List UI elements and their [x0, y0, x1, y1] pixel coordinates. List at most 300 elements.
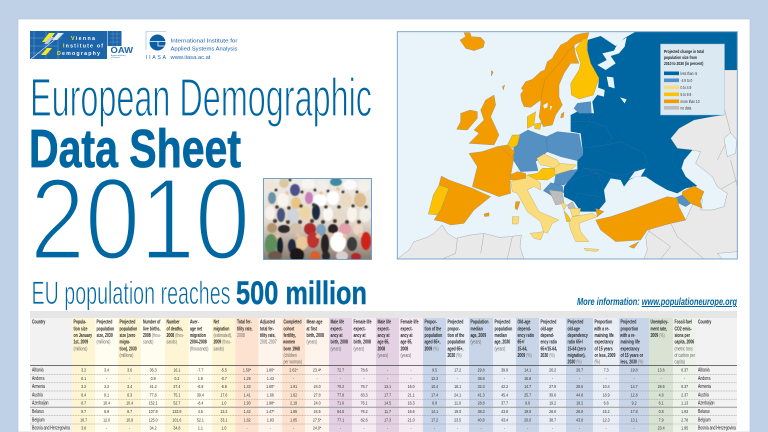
- table header row: 2008: [237, 332, 245, 338]
- row: Belgium: 77.1: [337, 417, 345, 423]
- row: Armenia: 27.9: [549, 384, 557, 389]
- table header row: 2001-2007: [260, 339, 277, 345]
- row: Andorra: 0.9: [151, 375, 156, 381]
- table header row: Old-age: [517, 319, 531, 325]
- table header row: 2008 (thou-: [143, 332, 161, 338]
- table header row: age 65,: [400, 339, 412, 345]
- row: Andorra: -: [340, 375, 342, 381]
- row: Belarus: [32, 408, 710, 414]
- row: Albania: 3.4: [104, 367, 110, 373]
- table header row: Number: [167, 319, 180, 325]
- logo: Vienna Institute of Demography: [30, 31, 107, 59]
- table header row: Male life: [331, 319, 345, 325]
- table header row: size, 2030: [97, 332, 113, 338]
- map: Czech Republic: [537, 154, 561, 168]
- row: Andorra: 16.8: [524, 375, 532, 381]
- row: Austria: 75.1: [173, 392, 181, 398]
- row: Azerbaijan: [32, 400, 715, 406]
- row: Austria: 77.8: [150, 392, 157, 398]
- row: Austria: 1.66: [267, 392, 274, 398]
- table header row: maining life: [594, 332, 614, 338]
- table header row: 1st, 2009: [73, 339, 89, 345]
- row: Belgium: 23.5: [454, 417, 462, 423]
- photo: crowd of people: [264, 178, 372, 262]
- map: Austria: [527, 168, 556, 180]
- row: Armenia: -5.9: [221, 384, 227, 389]
- row: Belarus: 13.2: [220, 408, 228, 414]
- row: Armenia: 1.43: [244, 384, 251, 389]
- row: Albania: 23.4*: [313, 367, 321, 373]
- row: Albania: 19.8: [631, 367, 638, 373]
- row: Bosnia and Herzegovina: 3.8: [81, 425, 87, 431]
- row: Bosnia and Herzegovina: -: [246, 425, 248, 431]
- row: Belarus: 24.5: [314, 408, 321, 414]
- table header row: Female life: [353, 319, 372, 325]
- row: Albania: 26.7: [576, 367, 584, 373]
- subtitle: EU population reaches 500 million: EU population reaches: [32, 275, 230, 311]
- row: Bosnia and Herzegovina: -: [552, 425, 554, 431]
- row: Albania: 13.6: [658, 367, 665, 373]
- row: Azerbaijan: 28.8: [478, 400, 485, 406]
- row: Belgium: 7.9: [659, 417, 664, 423]
- row: Azerbaijan: 16.3: [408, 400, 415, 406]
- row: Austria: 18.9: [603, 392, 610, 398]
- row: Belgium: 12.3: [603, 417, 610, 423]
- table header row: of 15 years: [594, 346, 613, 351]
- row: Austria: 44.8: [576, 392, 584, 398]
- map: Germany: [513, 130, 547, 172]
- map legend: [660, 44, 724, 115]
- table header row: old-age: [567, 326, 580, 331]
- table header row: 2004-2008: [190, 339, 207, 345]
- row: Azerbaijan: -8.4: [197, 400, 204, 406]
- row: Austria: 1.62: [290, 392, 298, 398]
- table header row: ency ratio: [540, 339, 557, 345]
- map: UK and Ireland: [469, 95, 499, 145]
- table header row: ancy at: [400, 332, 413, 338]
- table header row: propor-: [447, 326, 460, 331]
- table header row: sands): [143, 339, 154, 345]
- row: Andorra: -: [293, 375, 295, 381]
- table header row: Adjusted: [260, 319, 275, 325]
- title: Data Sheet: Data Sheet: [29, 119, 241, 179]
- row: Bosnia and Herzegovina: 34.2: [150, 425, 157, 431]
- row: Belgium: 43.4: [501, 417, 509, 423]
- row: Austria: 24.1: [454, 392, 462, 398]
- table header row: sands): [167, 339, 177, 345]
- row: Albania: 1.59*: [243, 367, 251, 373]
- row: Austria: Austria: [698, 392, 709, 398]
- map: North Africa: [397, 225, 524, 259]
- row: Belgium: 27.5*: [313, 417, 321, 423]
- row: Azerbaijan: 1.13: [681, 400, 689, 406]
- table header row: Mean age: [306, 319, 323, 325]
- table header row: age 65,: [377, 339, 389, 345]
- table header row: capita): [674, 359, 685, 365]
- row: Armenia: 25.6: [576, 384, 584, 389]
- table header row: proportion: [620, 326, 638, 331]
- table header row: Projected: [119, 319, 136, 325]
- map legend: more than 10: [680, 98, 700, 104]
- row: Andorra: Andorra: [698, 375, 711, 381]
- row: Belarus: 64.5: [337, 408, 345, 414]
- table header row: Net: [214, 319, 220, 325]
- row: Belgium: 33.1: [220, 417, 228, 423]
- map: Armenia: [674, 195, 691, 207]
- row: Andorra: 1.9: [198, 375, 203, 381]
- row: Bosnia and Herzegovina: Bosnia and Herzegovina: [698, 425, 736, 431]
- row: Armenia: 28.6: [658, 384, 665, 389]
- map: Slovakia: [554, 163, 577, 174]
- table header row: expect-: [331, 326, 343, 331]
- map: Cyprus: [629, 242, 639, 248]
- row: Belgium: 125.0: [149, 417, 158, 423]
- table header row: population: [97, 326, 115, 331]
- row: Albania: 7.3: [604, 367, 609, 373]
- logo: IIASA: International Institute for: [170, 38, 238, 44]
- table header row: of 15 years or: [620, 352, 643, 358]
- row: Austria: 25.7: [524, 392, 532, 398]
- table header row: 2030 (%): [447, 352, 462, 358]
- map legend: 0 to 4.9: [680, 84, 691, 90]
- logo: Vienna Institute of Demography: Demography: [57, 51, 100, 57]
- table header row: Total fer-: [237, 319, 252, 325]
- row: Albania: 16.1: [173, 367, 181, 373]
- table header row: size (zero: [119, 332, 136, 338]
- table header row: Completed: [283, 319, 302, 325]
- row: Belarus: 43.8: [501, 408, 509, 414]
- table header row: 65+/15-64,: [540, 346, 557, 351]
- map legend: population size from: [664, 54, 697, 60]
- table header row: ancy at: [353, 332, 366, 338]
- row: Austria: 4.8: [659, 392, 664, 398]
- table rows: [32, 367, 736, 431]
- logo: OAW: of Sciences: [111, 57, 120, 59]
- table header row: (years): [377, 352, 389, 358]
- row: Bosnia and Herzegovina: -: [363, 425, 365, 431]
- table header row: on January: [73, 332, 93, 338]
- row: Andorra: -: [316, 375, 318, 381]
- table header row: 2009 (thou-: [214, 339, 232, 345]
- row: Armenia: 3.4: [127, 384, 133, 389]
- table header row: sands): [214, 346, 224, 351]
- logo: IIASA: IIASA: [146, 55, 167, 61]
- table header row: ency ratio: [517, 332, 534, 338]
- table header row: (years): [400, 352, 412, 358]
- row: Belarus: 4.5: [198, 408, 203, 414]
- row: Bosnia and Herzegovina: -: [387, 425, 389, 431]
- map: projected population change in Europe: [397, 32, 737, 259]
- row: Austria: 39.6: [549, 392, 557, 398]
- row: Belgium: 10.7: [80, 417, 88, 423]
- table header row: live births,: [143, 326, 160, 331]
- table header row: Projected: [97, 319, 113, 325]
- row: Albania: 78.6: [361, 367, 368, 373]
- row: Bosnia and Herzegovina: -: [527, 425, 529, 431]
- row: Armenia: 27.4: [173, 384, 181, 389]
- table header row: cohort: [283, 326, 295, 331]
- logo: IIASA: www.iiasa.ac.at: [169, 55, 211, 61]
- row: Belgium: Belgium: [698, 417, 711, 423]
- table header row: aged 65+,: [425, 339, 440, 345]
- table header row: age, 2009: [470, 332, 487, 338]
- row: Austria: 17.7: [384, 392, 392, 398]
- table header row: migra-: [119, 339, 131, 345]
- table header row: or less, 2009: [594, 352, 616, 358]
- table header row: 2009 (%): [650, 332, 665, 338]
- row: Andorra: -: [457, 375, 459, 381]
- table header row: Projected: [620, 319, 637, 325]
- row: Andorra: -: [410, 375, 412, 381]
- row: Azerbaijan: 19.2: [576, 400, 584, 406]
- row: Belarus: 8.9: [104, 408, 110, 414]
- row: Belgium: 12.0: [103, 417, 111, 423]
- row: Azerbaijan: 24.0: [314, 400, 321, 406]
- row: Belarus: 19.8: [524, 408, 532, 414]
- row: Albania: [32, 367, 710, 373]
- row: Albania: 72.7: [337, 367, 345, 373]
- row: Andorra: 12.3: [431, 375, 439, 381]
- row: Armenia: -6.9: [197, 384, 204, 389]
- table header row: 2030 (%): [567, 359, 582, 365]
- row: Andorra: 0.1: [81, 375, 87, 381]
- row: Armenia: 24.0: [314, 384, 321, 389]
- table header row: (children: [283, 352, 297, 358]
- table header row: Male life: [377, 319, 392, 325]
- row: Austria: 17.4: [431, 392, 439, 398]
- row: Austria: 8.4: [81, 392, 87, 398]
- logo: OAW: Austrian Academy: [111, 54, 126, 57]
- table header row: 2008: [377, 346, 386, 351]
- table header row: at first: [306, 326, 318, 331]
- table header row: with a re-: [593, 326, 610, 331]
- row: Azerbaijan: 6.6: [604, 400, 609, 406]
- row: Albania: -5.5: [221, 367, 227, 373]
- row: Andorra: -: [579, 375, 581, 381]
- row: Azerbaijan: 1.0: [221, 400, 227, 406]
- map: Azerbaijan and Georgia: [682, 186, 704, 208]
- row: Albania: -: [410, 367, 412, 373]
- row: Armenia: [32, 383, 711, 389]
- row: Armenia: 42.2: [501, 384, 509, 389]
- row: Belarus: 17.8: [631, 408, 638, 414]
- row: Albania: Albania: [698, 367, 710, 373]
- row: Belgium: 17.2: [431, 417, 439, 423]
- row: Belarus: 0.8: [659, 408, 664, 414]
- map: Denmark: [527, 112, 541, 129]
- row: Armenia: 76.7: [361, 384, 368, 389]
- table header row: age net: [190, 326, 203, 331]
- table header row: depend-: [540, 332, 555, 338]
- row: Belarus: 15.2: [603, 408, 610, 414]
- table header row: (metric tons: [674, 346, 693, 351]
- row: Belarus: 1.65: [290, 408, 298, 414]
- table header row: women: [282, 339, 295, 345]
- row: Austria: 17.6: [220, 392, 228, 398]
- table header row: tility rate,: [260, 332, 275, 338]
- table header row: Projected: [495, 319, 511, 325]
- row: Azerbaijan: 8.7: [81, 400, 87, 406]
- row: Bosnia and Herzegovina: -: [270, 425, 271, 431]
- row: Belgium: 13.1: [631, 417, 638, 423]
- map: small islands: [491, 71, 564, 118]
- row: Bosnia and Herzegovina: 1.0: [221, 425, 227, 431]
- row: Albania: Albania: [32, 367, 44, 373]
- table header row: ment rate,: [650, 326, 667, 331]
- map legend: no data: [680, 105, 692, 111]
- row: Albania: 17.2: [454, 367, 462, 373]
- row: Belgium: 40.8: [478, 417, 485, 423]
- row: Belgium: 38.7: [549, 417, 557, 423]
- row: Belarus: 14.1: [431, 408, 439, 414]
- row: Armenia: 1.60*: [266, 384, 275, 389]
- row: Andorra: -: [633, 375, 635, 381]
- row: Bosnia and Herzegovina: -: [434, 425, 436, 431]
- table header row: Popula-: [73, 319, 87, 325]
- row: Azerbaijan: 10.4: [126, 400, 134, 406]
- table header row: maining life: [620, 339, 640, 345]
- table header row: Population: [470, 319, 489, 325]
- row: Austria: [32, 392, 709, 398]
- row: Azerbaijan: 71.0: [337, 400, 345, 406]
- row: Belgium: 101.6: [172, 417, 182, 423]
- table header row: age, 2030: [495, 339, 511, 345]
- row: Austria: 1.41: [244, 392, 251, 398]
- table header row: expect-: [353, 326, 366, 331]
- row: Bosnia and Herzegovina: -: [605, 425, 607, 431]
- table header row: ancy at: [331, 332, 343, 338]
- table header row: Country: [698, 319, 712, 325]
- table header row: ratio 65+/: [567, 339, 584, 345]
- row: Albania: 1.80*: [266, 367, 275, 373]
- table header row: of carbon per: [674, 352, 695, 358]
- table header row: (millions): [97, 339, 111, 345]
- map: Norway and Sweden: [521, 33, 589, 127]
- table header row: population: [425, 332, 443, 338]
- table header row: 2030 (%): [540, 352, 555, 358]
- map: Switzerland: [510, 172, 526, 180]
- table header row: median: [470, 326, 483, 331]
- map legend: -4.9 to 0: [680, 77, 693, 83]
- table header row: Propor-: [425, 319, 438, 325]
- table header row: sions per: [674, 332, 690, 338]
- map legend: 2010 to 2030 (in percent): [664, 60, 704, 66]
- row: Albania: 14.1: [524, 367, 532, 373]
- table header row: depend-: [517, 326, 532, 331]
- row: Albania: 36.3: [150, 367, 157, 373]
- map: White Sea and Azov: [597, 37, 627, 70]
- row: Azerbaijan: 1.93: [244, 400, 251, 406]
- row: Albania: 39.9: [501, 367, 509, 373]
- table header row: expectancy: [594, 339, 614, 345]
- row: Belgium: 21.0: [408, 417, 415, 423]
- map: dark blue countries, less than -5: [564, 32, 737, 212]
- row: Armenia: 13.1: [384, 384, 392, 389]
- table header row: (thousands): [190, 346, 209, 351]
- row: Bosnia and Herzegovina: -: [106, 425, 108, 431]
- row: Andorra: Andorra: [32, 375, 45, 381]
- map: Balkans: [561, 202, 581, 217]
- row: Belgium: 1.85: [290, 417, 298, 423]
- row: Austria: 45.4: [501, 392, 509, 398]
- row: Austria: 9.1: [104, 392, 110, 398]
- row: Armenia: 18.1: [454, 384, 462, 389]
- row: Bosnia and Herzegovina: 23.4: [658, 425, 665, 431]
- row: Armenia: 3.2: [104, 384, 110, 389]
- row: Bosnia and Herzegovina: 34.8: [173, 425, 181, 431]
- row: Bosnia and Herzegovina: -: [129, 425, 131, 431]
- table header row: 2008 (thou-: [167, 332, 185, 338]
- table header row: Proportion: [594, 319, 613, 325]
- table header row: (millions): [119, 352, 134, 358]
- row: Armenia: 14.7: [631, 384, 638, 389]
- row: Belarus: 107.9: [149, 408, 158, 414]
- row: Andorra: -: [106, 375, 108, 381]
- row: Belgium: 43.8: [576, 417, 584, 423]
- row: Belarus: 1.42: [244, 408, 251, 414]
- row: Andorra: [32, 375, 711, 381]
- table header row: migration: [190, 332, 206, 338]
- row: Belgium: 2.78: [681, 417, 689, 423]
- table header row: Female life: [400, 319, 419, 325]
- logo: Vienna Institute of Demography: Institute of: [63, 44, 103, 50]
- table header row: migration),: [567, 352, 586, 358]
- table header row: Fossil-fuel: [674, 319, 692, 325]
- row: Bosnia and Herzegovina: -: [410, 425, 412, 431]
- table header row: (millions): [73, 346, 88, 351]
- row: Belarus: Belarus: [32, 408, 44, 414]
- row: Belarus: 76.2: [361, 408, 368, 414]
- map: Italy: [511, 175, 559, 233]
- row: Albania: 3.6: [127, 367, 133, 373]
- row: Austria: 8.3: [127, 392, 133, 398]
- table header row: of deaths,: [167, 326, 183, 331]
- row: Azerbaijan: 152.1: [149, 400, 158, 406]
- row: Andorra: -: [684, 375, 686, 381]
- row: Austria: Austria: [32, 392, 43, 398]
- map: non-data land: [644, 70, 737, 259]
- table header row: population: [447, 339, 466, 345]
- table header row: migration: [214, 326, 230, 331]
- row: Andorra: -: [504, 375, 506, 381]
- row: Andorra: -0.7: [221, 375, 227, 381]
- row: Albania: 0.37: [681, 367, 689, 373]
- row: Azerbaijan: Azerbaijan: [32, 400, 49, 406]
- row: Andorra: 38.8: [478, 375, 485, 381]
- table header row: Unemploy-: [650, 319, 669, 325]
- table header row: with a re-: [619, 332, 636, 338]
- map: Bosnia no data: [549, 190, 564, 205]
- title: year 2010: 2010: [30, 154, 250, 284]
- logo: IIASA: Applied Systems Analysis: [170, 46, 238, 52]
- title: European Demographic: European Demographic: [30, 68, 372, 128]
- table header row: median: [495, 332, 507, 338]
- row: Armenia: 10.4: [603, 384, 610, 389]
- row: Andorra: 1.29: [244, 375, 251, 381]
- row: Belarus: 11.7: [384, 408, 391, 414]
- table header row: aged 65+,: [447, 346, 463, 351]
- row: Andorra: 1.43: [267, 375, 274, 381]
- row: Belarus: 38.3: [478, 408, 485, 414]
- table header row: expect-: [377, 326, 390, 331]
- table header row: (years): [470, 339, 482, 345]
- map legend: less than -5: [680, 70, 698, 76]
- row: Armenia: 1.91: [290, 384, 298, 389]
- table header row: Projected: [567, 319, 584, 325]
- table header row: total fer-: [260, 326, 274, 331]
- table header row: capita, 2006: [674, 339, 695, 345]
- row: Albania: 29.8: [478, 367, 485, 373]
